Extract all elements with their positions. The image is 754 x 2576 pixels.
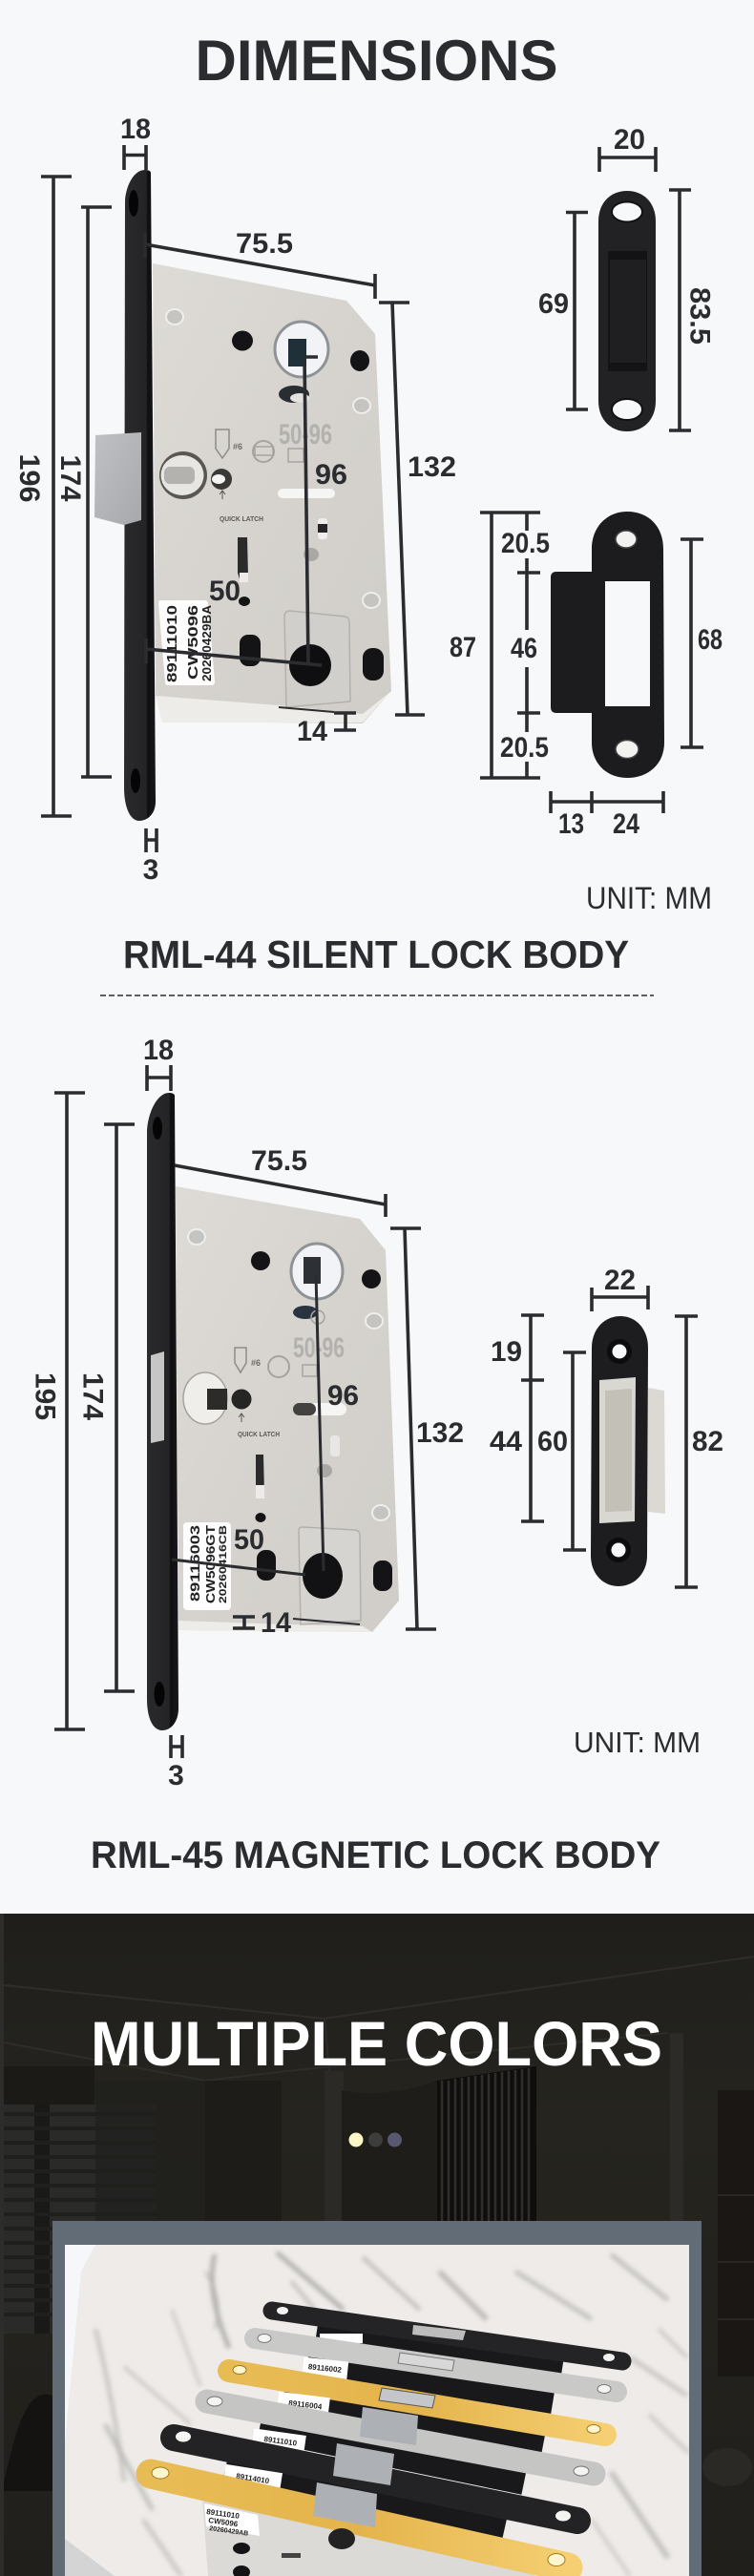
label: 89111010 <box>252 2428 306 2451</box>
dimension: 20 <box>599 124 656 172</box>
lock case strips <box>226 2331 562 2527</box>
label: 89116002: 89116002 <box>307 2362 343 2375</box>
dimension: 14 <box>233 1607 360 1639</box>
barcode label: 89116003 <box>187 1525 202 1602</box>
lock case plate <box>176 1186 399 1632</box>
panel: magnetic strike plate 22 x 82 <box>490 1265 723 1587</box>
dimension: case height 132 <box>390 1228 464 1629</box>
latch bolt black <box>333 2443 394 2485</box>
lock case details <box>159 309 384 681</box>
dimension: case height 132: 132 <box>416 1417 464 1449</box>
dimension: case height 132: 132 <box>408 451 456 483</box>
barcode label: CW5096 <box>185 605 201 680</box>
dimension: 20.5 / 46 / 20.5: 20.5 <box>500 732 549 764</box>
dimension: 60: 60 <box>537 1426 568 1457</box>
dimension: 60 <box>537 1352 586 1550</box>
label and details on front lock <box>204 2503 355 2576</box>
dimension: height 195: 195 <box>29 1372 61 1420</box>
label and details on front lock: 20260429AB <box>209 2525 249 2538</box>
dimension: 82: 82 <box>692 1426 723 1457</box>
bar: gold 1 <box>229 2365 605 2435</box>
dimension: 20.5 / 46 / 20.5 <box>500 513 550 778</box>
label: 89111010: 89111010 <box>263 2435 298 2448</box>
barcode label: CW5096GT <box>203 1525 218 1603</box>
dimension: 87 <box>450 513 540 778</box>
lock case details: 50-96 <box>279 419 332 450</box>
dimension: height 196: 196 <box>13 454 45 502</box>
dimension: depth 75.5: 75.5 <box>251 1145 307 1177</box>
lock case plate <box>153 263 391 723</box>
color swatch dots <box>349 2132 402 2147</box>
lock case front steel <box>202 2499 534 2576</box>
panel: multiple colors room background <box>0 1914 754 2576</box>
unit note 2: UNIT: MM <box>574 1726 701 1759</box>
lock case details: QUICK LATCH <box>220 516 263 523</box>
dimension: 14: 14 <box>261 1607 291 1639</box>
dimension: faceplate thickness 3: 3 <box>168 1760 184 1791</box>
dimension: backset 50: 50 <box>234 1524 264 1556</box>
dimension: backset 50 <box>172 1524 305 1575</box>
faceplate <box>124 170 156 821</box>
dimension: 83.5: 83.5 <box>683 287 716 345</box>
dimension: 83.5 <box>669 190 716 430</box>
dimension: backset 50 <box>146 576 322 665</box>
dimension: faceplate thickness 3 <box>143 828 158 886</box>
panel: magnetic strike plate 20 x 83.5 <box>538 124 716 431</box>
bar: gold 2 <box>151 2467 568 2567</box>
heading: multiple colors: MULTIPLE COLORS <box>91 2008 662 2079</box>
dimension: 14: 14 <box>297 716 327 747</box>
latch bolt <box>94 432 141 525</box>
dimension: 19 / 44 <box>490 1315 544 1521</box>
label and details on front lock: CW5096 <box>208 2516 239 2528</box>
dimension: 22: 22 <box>604 1265 636 1296</box>
dimension: 69 <box>538 212 588 409</box>
label: 89116003 <box>320 2334 363 2343</box>
label: 89116004: 89116004 <box>288 2398 323 2411</box>
label: 89114010: 89114010 <box>236 2472 270 2485</box>
dimension: 82 <box>675 1316 723 1587</box>
dimension: centre distance 96 <box>304 357 347 664</box>
faceplate <box>147 1093 178 1730</box>
dimension: width 18: 18 <box>143 1035 174 1066</box>
bar: black 1 <box>272 2307 622 2361</box>
dimension: 19 / 44: 19 <box>491 1336 522 1368</box>
dimension: case height 132 <box>379 303 456 715</box>
magnet housing <box>648 1388 665 1514</box>
dimension: width 18: 18 <box>120 114 151 145</box>
dimension: backset 50: 50 <box>209 576 241 607</box>
marble background <box>65 2245 689 2576</box>
heading: RML-44: RML-44 SILENT LOCK BODY <box>123 932 629 976</box>
latch bolt silver <box>360 2407 418 2445</box>
panel: RML-44 silent lock body <box>13 114 456 886</box>
dimension: faceplate thickness 3: 3 <box>143 854 158 886</box>
dimension: height 174: 174 <box>76 1372 109 1420</box>
barcode label: 89111010 <box>164 605 180 682</box>
label and details on front lock: 89111010 <box>206 2507 241 2521</box>
cylinder cover plate <box>299 1527 361 1624</box>
panel: RML-45 magnetic lock body <box>29 1035 464 1791</box>
strike plate black <box>591 1316 648 1586</box>
dimension: depth 75.5 <box>145 228 375 299</box>
label: 89116002 <box>303 2357 349 2379</box>
label: 89114010 <box>223 2464 283 2488</box>
barcode label <box>183 1522 231 1610</box>
dimension: height 196 <box>13 177 72 816</box>
dimension: width 18 <box>120 114 151 170</box>
bar: black 2 <box>174 2432 577 2522</box>
dimension: 20.5 / 46 / 20.5: 46 <box>511 633 537 664</box>
dimension: 13 and 24 <box>551 791 663 840</box>
barcode label <box>158 600 215 685</box>
dimension: depth 75.5 <box>175 1145 386 1217</box>
bar: silver 1 <box>255 2335 617 2394</box>
dimension: centre distance 96 <box>316 1274 359 1571</box>
dimension: 13 and 24: 24 <box>613 808 639 840</box>
heading: RML-45: RML-45 MAGNETIC LOCK BODY <box>91 1834 660 1876</box>
dimension: 68: 68 <box>698 624 723 656</box>
barcode label: 20260416CB <box>218 1525 229 1603</box>
cylinder cover plate <box>284 611 350 707</box>
dimension: height 174: 174 <box>54 454 86 502</box>
lock case details: QUICK LATCH <box>238 1432 280 1438</box>
latch bolt gold <box>313 2482 377 2527</box>
dimension: height 174 <box>54 207 112 777</box>
lock case details: 50-96 <box>293 1332 345 1364</box>
dimension: 20.5 / 46 / 20.5: 20.5 <box>501 528 550 559</box>
photo frame <box>52 2221 702 2576</box>
dimension: centre distance 96: 96 <box>327 1380 359 1412</box>
dimension: depth 75.5: 75.5 <box>236 228 293 260</box>
dimension: 68 <box>681 539 723 747</box>
page background <box>0 0 754 1914</box>
panel: latch strike plate 87 x 37 <box>450 512 723 840</box>
title: dimensions: DIMENSIONS <box>195 29 557 93</box>
unit note 1: UNIT: MM <box>586 881 712 915</box>
dimension: 19 / 44: 44 <box>490 1426 522 1457</box>
panel: six lock bodies on marble <box>65 2245 689 2576</box>
strike plate with wing <box>551 512 664 778</box>
dimension: 69: 69 <box>538 288 569 320</box>
bar: silver 2 <box>207 2397 594 2476</box>
label: 89116004 <box>278 2392 330 2413</box>
dimension: 13 and 24: 13 <box>558 808 584 840</box>
lock case details: #6 <box>251 1358 261 1368</box>
barcode label: 20260429BA <box>199 604 214 681</box>
strike plate black <box>598 191 656 431</box>
dimension: width 18 <box>143 1035 174 1091</box>
dimension: 87: 87 <box>450 632 476 663</box>
dimension: 20: 20 <box>614 124 645 156</box>
dimension: height 195 <box>29 1093 85 1729</box>
dimension: 22 <box>592 1265 648 1311</box>
lock case details: #6 <box>233 442 242 451</box>
lock case details <box>183 1229 392 1591</box>
dimension: centre distance 96: 96 <box>315 459 347 491</box>
dimension: height 174 <box>76 1124 135 1691</box>
dimension: 14 <box>279 707 356 747</box>
dimension: faceplate thickness 3 <box>168 1735 184 1791</box>
